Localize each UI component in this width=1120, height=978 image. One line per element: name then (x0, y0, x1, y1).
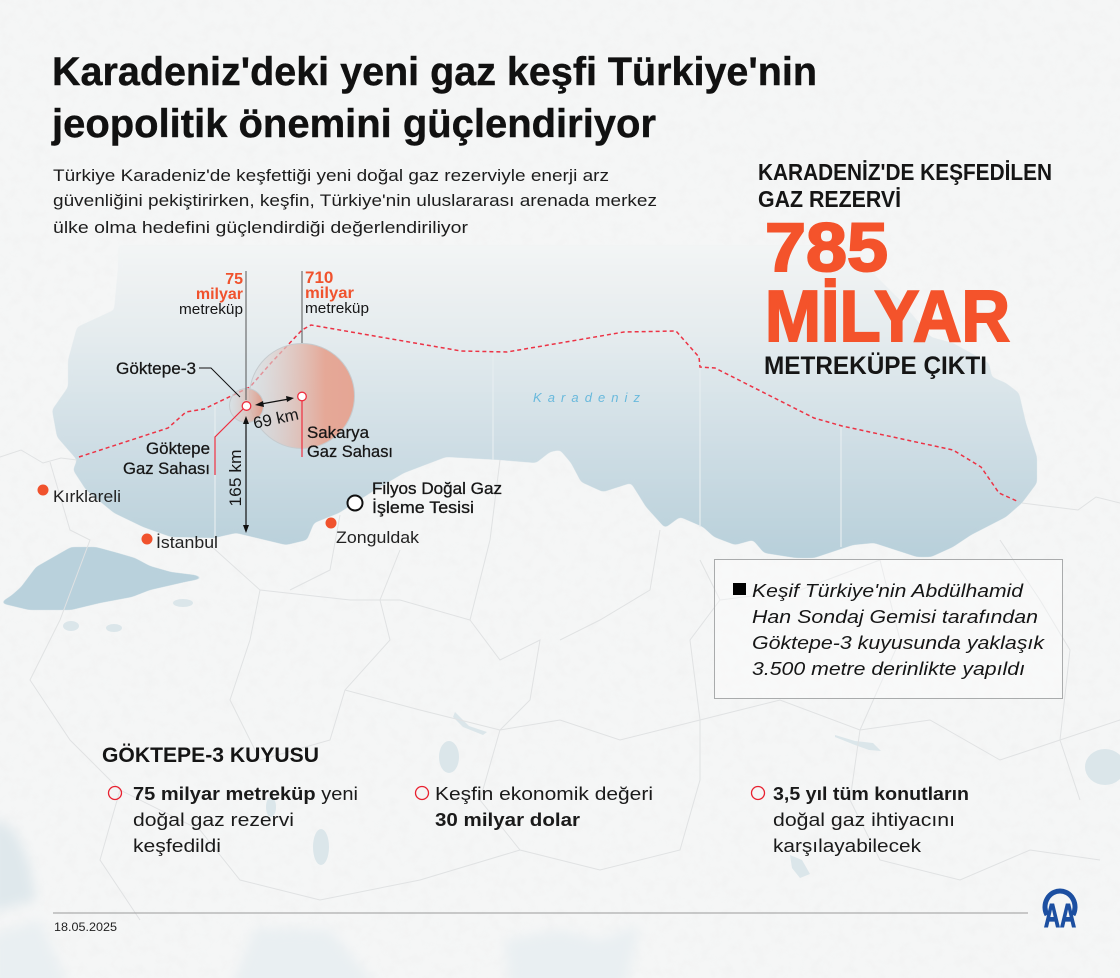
intro text (53, 166, 657, 237)
Sakarya callout value (305, 268, 369, 317)
Goktepe callout value: metreküp (179, 301, 243, 318)
Sakarya gas field label: Sakarya (307, 424, 370, 442)
label: Karadeniz: K a r a d e n i z (533, 390, 640, 405)
intro text: ülke olma hedefini güçlendirdiği değerlendiriliyor (53, 218, 468, 237)
fact 3: 3,5 yıl tüm konutların (773, 783, 969, 804)
Sakarya callout value: milyar (305, 285, 354, 302)
Sakarya callout value: 710 (305, 268, 333, 287)
Sakarya leader line (301, 271, 303, 343)
Filyos facility: İşleme Tesisi (372, 498, 474, 517)
intro text: Türkiye Karadeniz'de keşfettiği yeni doğal gaz rezerviyle enerji arz (53, 166, 609, 185)
fact 2: 30 milyar dolar (435, 809, 580, 830)
distance arrow 165 km: 165 km (227, 450, 245, 506)
headline figure block (758, 159, 1052, 380)
Filyos facility (348, 480, 502, 517)
fact 1: 75 milyar metreküp yeni (133, 783, 358, 804)
intro text: güvenliğini pekiştirirken, keşfin, Türkiye'nin uluslararası arenada merkez (53, 191, 657, 210)
reserve label (758, 159, 1052, 212)
title: jeopolitik önemini güçlendiriyor (51, 102, 656, 146)
Goktepe leader line (245, 271, 247, 400)
city: Kirklareli (38, 484, 121, 506)
Goktepe callout value (179, 271, 243, 318)
note box (714, 560, 1062, 698)
city: Istanbul: İstanbul (156, 533, 218, 552)
Sakarya marker (298, 392, 306, 401)
Goktepe gas field label: Göktepe (146, 440, 210, 458)
title: Karadeniz'deki yeni gaz keşfi Türkiye'nin (52, 50, 817, 94)
Goktepe marker (242, 402, 251, 410)
fact 1 (108, 783, 358, 856)
Goktepe gas field label: Gaz Sahası (123, 460, 210, 478)
fact 1: keşfedildi (133, 835, 221, 856)
Sakarya callout value: metreküp (305, 300, 369, 317)
section heading: GÖKTEPE-3 KUYUSU (102, 744, 319, 767)
note text: Han Sondaj Gemisi tarafından (752, 607, 1038, 627)
Goktepe gas field label (123, 406, 246, 478)
785 figure: 785 (765, 209, 888, 286)
Filyos facility: Filyos Doğal Gaz (372, 480, 502, 498)
Goktepe-3 label: Göktepe-3 (116, 360, 196, 378)
Sakarya gas field circle (250, 344, 354, 448)
lakes and southern seas (63, 599, 1120, 878)
note text (752, 581, 1045, 679)
unit: METREKÜPE ÇIKTI (764, 351, 987, 380)
fact 1: doğal gaz rezervi (133, 809, 294, 830)
Sea of Marmara (0, 547, 205, 610)
city: Zonguldak: Zonguldak (336, 529, 420, 547)
city: Kirklareli: Kırklareli (53, 488, 121, 506)
fact 3: doğal gaz ihtiyacını (773, 809, 955, 830)
faint sea gridlines (215, 353, 841, 547)
title (51, 50, 817, 146)
icon: AA logo (1044, 891, 1076, 934)
Black Sea (52, 245, 1037, 558)
Goktepe callout value: milyar (196, 286, 243, 303)
fact 2 (416, 783, 653, 830)
Goktepe callout value: 75 (225, 271, 243, 288)
fact 3: karşılayabilecek (773, 835, 922, 856)
fact 2: Keşfin ekonomik değeri (435, 783, 653, 804)
Goktepe-3 label (116, 360, 240, 397)
note text: Göktepe-3 kuyusunda yaklaşık (752, 633, 1045, 653)
icon: AA logo: AA (1044, 897, 1076, 934)
reserve label: KARADENİZ'DE KEŞFEDİLEN (758, 159, 1052, 185)
reserve label: GAZ REZERVİ (758, 186, 901, 212)
distance arrow 69 km: 69 km (252, 406, 300, 433)
date: 18.05.2025 (54, 922, 117, 934)
city: Zonguldak (326, 518, 420, 547)
Sakarya gas field label: Gaz Sahası (307, 443, 393, 461)
Goktepe gas field circle (230, 388, 264, 422)
Sakarya gas field label (302, 397, 393, 461)
note text: Keşif Türkiye'nin Abdülhamid (752, 581, 1024, 601)
milyar figure: MİLYAR (765, 277, 1010, 357)
footer rule (53, 912, 1028, 914)
square bullet (733, 583, 746, 595)
distance arrow 165 km (227, 416, 249, 533)
province borders (0, 450, 1120, 920)
maritime boundary (79, 325, 1019, 502)
fact 3 (752, 783, 969, 856)
note text: 3.500 metre derinlikte yapıldı (752, 659, 1025, 679)
